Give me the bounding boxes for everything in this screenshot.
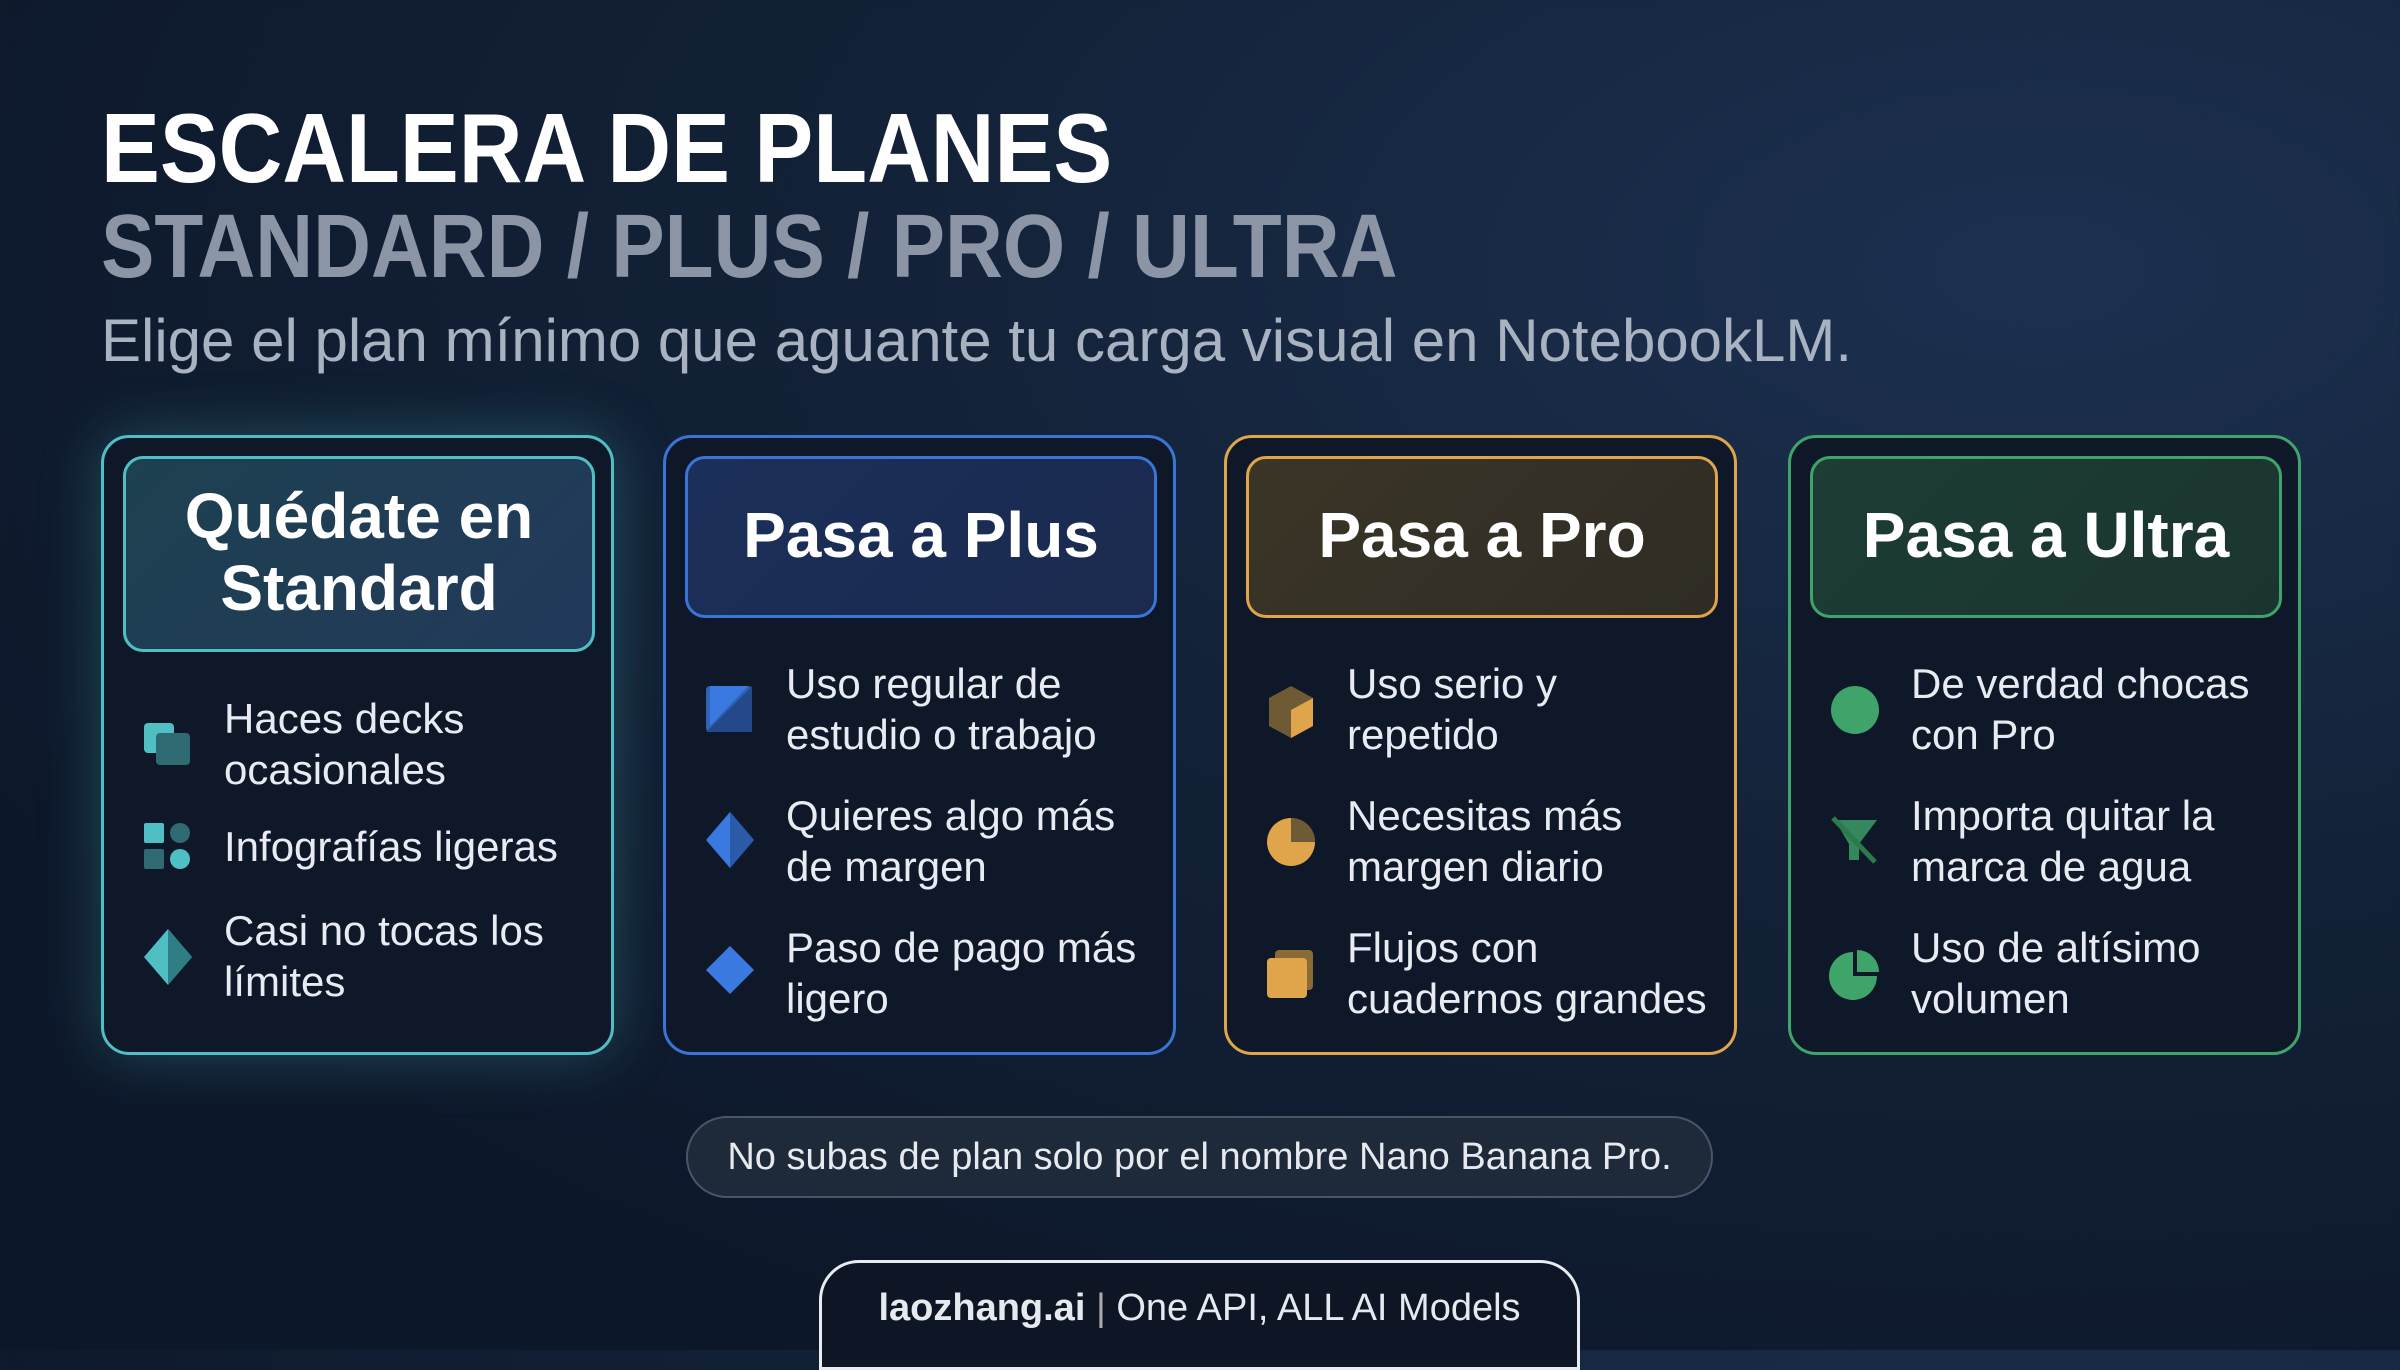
panel: standard: límites (224, 958, 345, 1005)
panel: plus: estudio o trabajo (786, 711, 1097, 758)
panel: pro: margen diario (1347, 843, 1604, 890)
item: margen (706, 792, 1115, 890)
callout: note: No subas de plan solo por el nombre Nano Banana Pro. (727, 1136, 1672, 1178)
panel: plus: de margen (786, 843, 987, 890)
callout: note (686, 1116, 1713, 1198)
heading: ultra (1810, 456, 2282, 618)
item: diario (1267, 792, 1622, 890)
panel: ultra: Uso de altísimo (1911, 924, 2200, 971)
panel: pro: cuadernos grandes (1347, 975, 1707, 1022)
panel: standard: ocasionales (224, 746, 446, 793)
panel: ultra: volumen (1911, 975, 2070, 1022)
item: flujos (1267, 924, 1707, 1022)
panel: plus: ligero (786, 975, 889, 1022)
panel: plus: Quieres algo más (786, 792, 1115, 839)
footer tab: laozhang.ai | One API, ALL AI Models (878, 1287, 1521, 1329)
item: marca de agua (1831, 792, 2214, 890)
heading: standard: Quédate en (185, 480, 533, 552)
panel: ultra: Importa quitar la (1911, 792, 2214, 839)
panel: pro: Flujos con (1347, 924, 1538, 971)
item: volumen (1829, 924, 2200, 1022)
item: pago (706, 924, 1136, 1022)
item: serio (1269, 660, 1557, 758)
panel: ultra (1788, 435, 2301, 1055)
item: uso regular (706, 660, 1097, 758)
panel: ultra: marca de agua (1911, 843, 2191, 890)
item: chocas (1831, 660, 2250, 758)
panel: standard (101, 435, 614, 1055)
panel: ultra: con Pro (1911, 711, 2056, 758)
panel: plus (663, 435, 1176, 1055)
subtitle: STANDARD / PLUS / PRO / ULTRA (101, 197, 1397, 297)
panel: pro: Uso serio y (1347, 660, 1557, 707)
panel: pro: Necesitas más (1347, 792, 1622, 839)
footer tab (819, 1260, 1580, 1370)
panel: plus: Uso regular de (786, 660, 1061, 707)
heading: plus (685, 456, 1157, 618)
title: ESCALERA DE PLANES (101, 93, 1112, 203)
item: límites (144, 907, 544, 1005)
heading: plus: Pasa a Plus (743, 499, 1099, 571)
panel: standard: Infografías ligeras (224, 823, 558, 870)
heading: pro: Pasa a Pro (1318, 499, 1646, 571)
panel: pro (1224, 435, 1737, 1055)
panel: ultra: De verdad chocas (1911, 660, 2250, 707)
tagline: Elige el plan mínimo que aguante tu carga visual en NotebookLM. (101, 307, 1852, 374)
panel: pro: repetido (1347, 711, 1499, 758)
item: decks (144, 695, 464, 793)
panel: standard: Casi no tocas los (224, 907, 544, 954)
panel: plus: Paso de pago más (786, 924, 1136, 971)
heading: ultra: Pasa a Ultra (1863, 499, 2229, 571)
heading: pro (1246, 456, 1718, 618)
item: infografías (144, 823, 558, 870)
heading: standard: Standard (220, 552, 498, 624)
panel: standard: Haces decks (224, 695, 464, 742)
heading: standard (123, 456, 595, 652)
